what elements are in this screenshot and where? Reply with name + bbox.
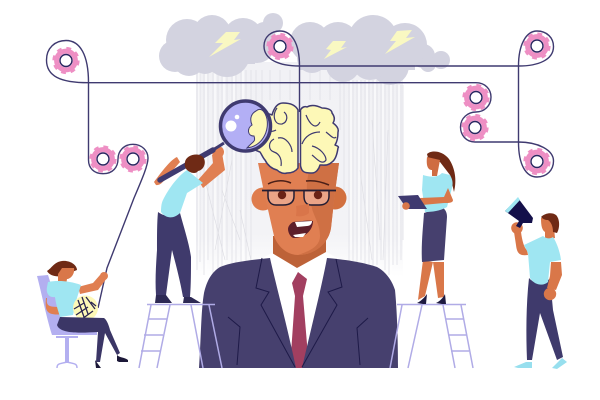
shoes xyxy=(95,355,128,368)
torso xyxy=(161,170,203,217)
legs xyxy=(418,260,444,300)
bolt: right xyxy=(385,30,415,54)
ladder: left xyxy=(139,304,222,368)
torso xyxy=(47,281,81,317)
left arm xyxy=(514,232,528,255)
heels xyxy=(417,294,446,304)
gears xyxy=(54,34,549,174)
right arm xyxy=(198,153,225,188)
megaphone xyxy=(505,198,533,228)
eyebrows xyxy=(268,181,329,185)
tie xyxy=(290,272,309,368)
head xyxy=(185,155,205,173)
hair xyxy=(427,151,455,192)
cloud: right xyxy=(290,15,450,85)
neck and face xyxy=(541,218,555,240)
shirt xyxy=(255,252,345,368)
rain xyxy=(196,62,403,290)
hair xyxy=(47,261,77,276)
skirt xyxy=(422,207,447,262)
legs xyxy=(57,317,120,362)
face shadow xyxy=(298,163,339,255)
wire network xyxy=(46,31,554,308)
brain xyxy=(247,103,338,173)
jacket xyxy=(199,258,398,368)
glasses xyxy=(262,190,336,205)
bolt: left xyxy=(209,32,241,57)
magnifying glass xyxy=(220,101,270,151)
pupils xyxy=(278,191,286,199)
face xyxy=(58,268,74,285)
legs xyxy=(526,278,563,360)
central man xyxy=(199,163,398,368)
ladder: right xyxy=(390,304,473,368)
nose xyxy=(296,204,309,216)
hand xyxy=(402,202,410,210)
right arm xyxy=(547,262,562,290)
torso xyxy=(524,236,561,285)
left arm xyxy=(46,298,73,314)
magnifier handle xyxy=(160,150,213,180)
shoes xyxy=(514,358,567,369)
raised arm xyxy=(78,275,107,294)
yarn ball xyxy=(73,296,98,320)
cloud: left xyxy=(159,13,283,77)
legs xyxy=(156,212,191,297)
left arm xyxy=(154,157,180,185)
man with megaphone xyxy=(505,197,567,369)
face xyxy=(427,157,440,176)
shoes xyxy=(155,295,201,303)
chair xyxy=(37,275,97,335)
forearm xyxy=(420,188,453,205)
tablet xyxy=(398,195,427,209)
right woman on ladder xyxy=(390,151,473,368)
bolt: middle xyxy=(324,41,347,59)
left worker on ladder xyxy=(139,143,225,368)
seated woman xyxy=(37,261,128,368)
right ear xyxy=(324,186,346,210)
left ear xyxy=(252,188,274,210)
torso xyxy=(422,173,453,212)
head xyxy=(258,163,339,255)
neck xyxy=(273,236,326,272)
mouth xyxy=(288,221,313,238)
